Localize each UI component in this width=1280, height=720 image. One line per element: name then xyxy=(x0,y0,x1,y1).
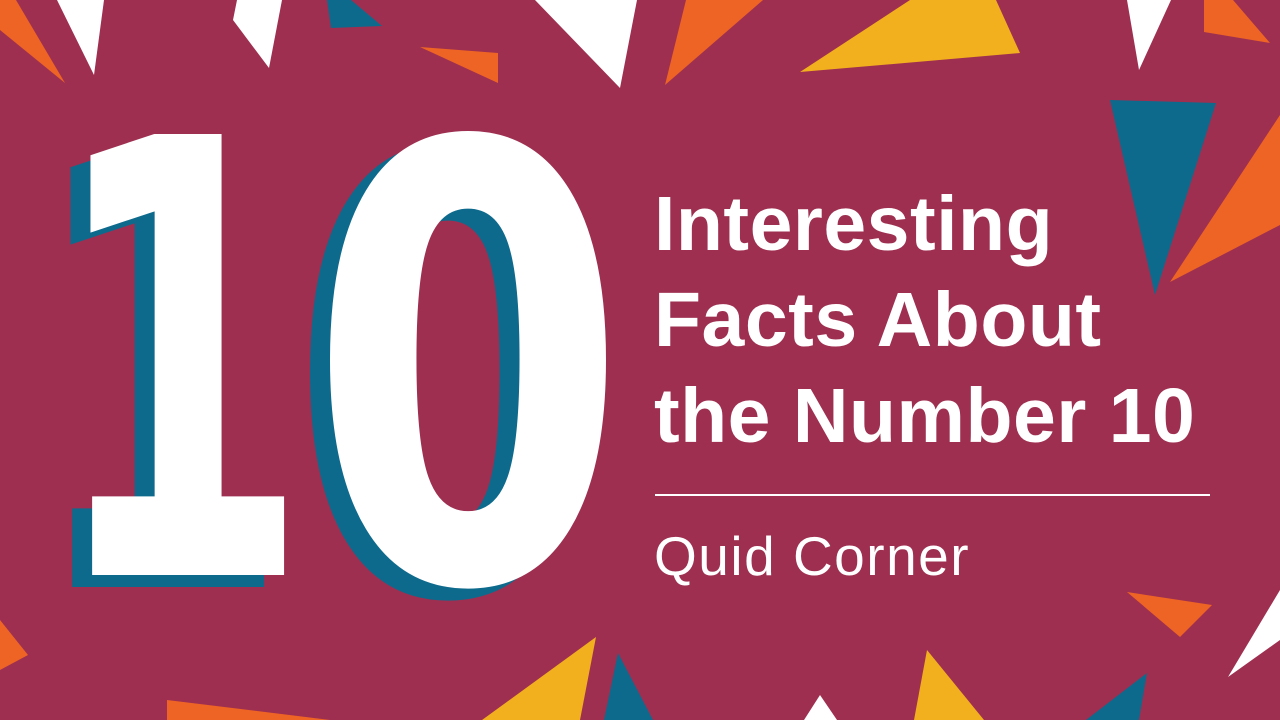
big number 10: 1 xyxy=(48,13,310,718)
title xyxy=(654,181,1195,459)
title: Interesting xyxy=(654,181,1053,267)
title: the Number 10 xyxy=(654,373,1195,459)
big number 10: 1 xyxy=(28,25,290,720)
brand: Quid Corner: Quid Corner xyxy=(654,525,970,587)
divider line xyxy=(655,494,1210,496)
big number 10: 0 xyxy=(308,18,628,720)
big number 10: 0 xyxy=(288,30,608,720)
title: Facts About xyxy=(654,277,1102,363)
